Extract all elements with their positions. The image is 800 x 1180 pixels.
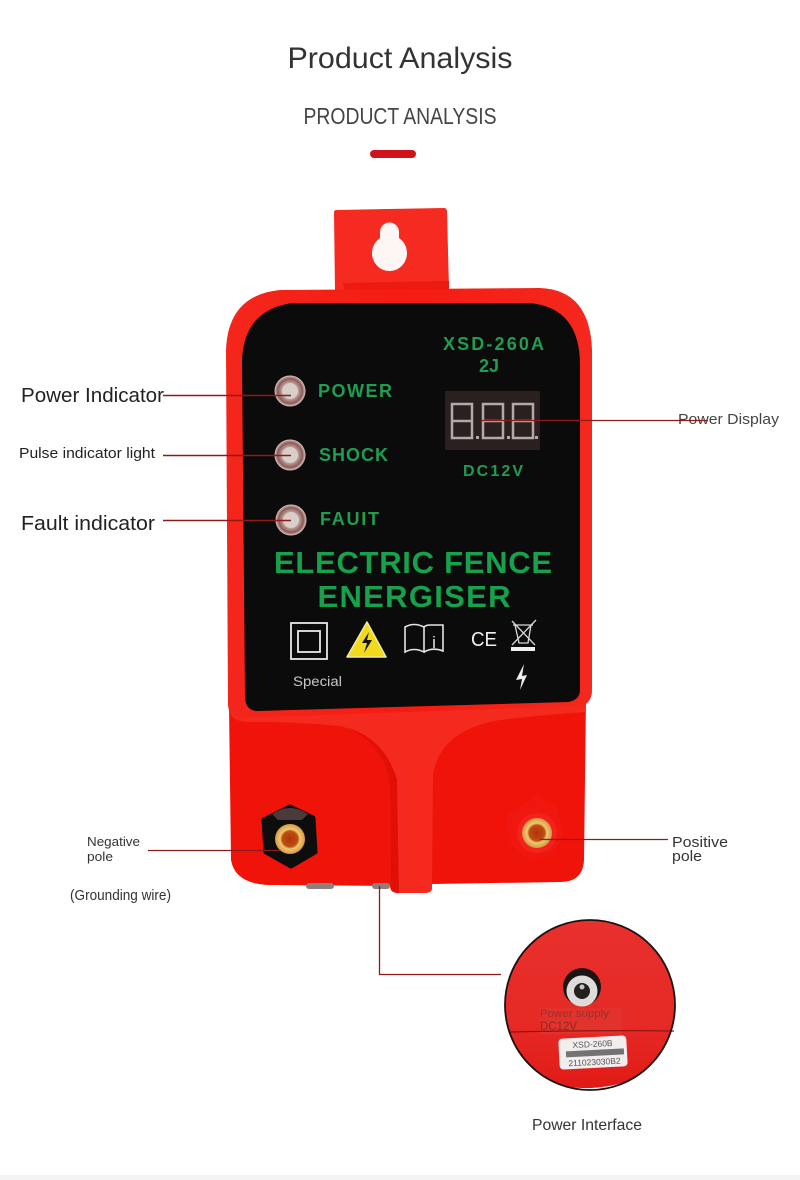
connector line to power interface [380,886,501,974]
power supply label: DC12V [540,1021,577,1033]
power interface detail circle [505,920,675,1100]
grounding wire note: (Grounding wire) [70,888,171,904]
product name [274,545,552,614]
icon: high voltage warning [347,622,386,657]
indicator: shock: SHOCK [319,445,388,465]
callout: negative pole: pole [87,850,113,864]
product name: ENERGISER [318,579,510,614]
indicator: power [274,376,392,406]
icon: double insulation square [291,623,327,659]
callout: power display: Power Display [678,411,780,428]
icon: lightning bolt [516,664,527,690]
model label: XSD-260A [443,334,544,354]
callout: positive pole: pole [672,848,702,865]
keyhole [372,222,407,271]
positive terminal [508,797,562,858]
callout: positive pole: Positive [672,834,728,851]
callout: pulse indicator light: Pulse indicator light [19,445,156,462]
indicator: shock [274,440,388,470]
callout: positive pole [540,834,728,865]
indicator: power: POWER [318,381,392,401]
subtitle: PRODUCT ANALYSIS [304,103,496,129]
callout: fault indicator: Fault indicator [21,513,155,535]
circle outline [505,920,675,1090]
callout: negative pole: Negative [87,835,140,849]
callout: power indicator: Power Indicator [21,385,164,407]
serial sticker: 211023030B2 [568,1056,621,1068]
model label [443,334,544,376]
bottom page strip [0,1175,800,1180]
upper red shell [226,288,592,718]
DC jack [563,968,601,1006]
icon: manual book [405,624,443,652]
power supply label: Power supply [540,1008,610,1020]
special label: Special [293,674,342,689]
icon: WEEE bin [511,620,536,651]
lower red housing [229,695,586,893]
indicator: fault: FAUIT [320,509,379,529]
LED display [445,391,540,450]
callout: negative pole [87,835,280,864]
title: Product Analysis [288,42,512,75]
serial sticker: XSD-260B [572,1038,613,1050]
seam line [510,1031,674,1032]
bottom screw heads [306,883,334,889]
icon: manual book: i [432,633,436,652]
voltage label: DC12V [463,463,523,480]
model label: 2J [479,356,499,376]
icon: CE mark: CE [471,629,497,651]
energiser device [226,208,592,893]
product name: ELECTRIC FENCE [274,545,552,580]
red accent bar [370,150,416,158]
central stem and collar [230,700,585,893]
power supply label [540,1008,610,1033]
serial sticker [558,1035,628,1070]
black control panel [242,303,580,711]
negative terminal [264,807,315,866]
power interface caption: Power Interface [532,1117,642,1134]
indicator: fault [276,504,379,536]
mounting bracket [334,208,449,292]
